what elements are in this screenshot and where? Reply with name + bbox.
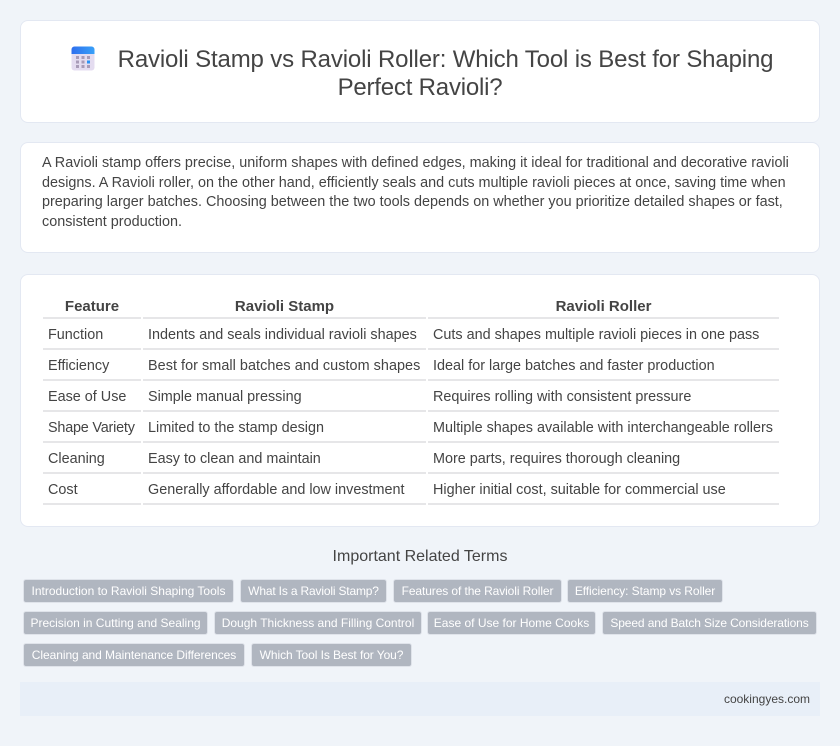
- comparison table: Generally affordable and low investment: [148, 482, 405, 498]
- table panel: [20, 274, 820, 527]
- comparison table: Easy to clean and maintain: [148, 451, 321, 467]
- related terms tags: Speed and Batch Size Considerations: [610, 616, 809, 630]
- row: shape variety: Shape Variety: [48, 420, 135, 436]
- comparison table: Multiple shapes available with interchangeable rollers: [433, 420, 773, 436]
- related terms tags: Ease of Use for Home Cooks: [434, 616, 589, 630]
- row: function: Function: [48, 327, 103, 343]
- related terms tags: Which Tool Is Best for You?: [260, 648, 403, 662]
- comparison table: [43, 298, 779, 505]
- description text: designs. A Ravioli roller, on the other hand, efficiently seals and cuts multiple ravioli pieces at once, saving time when: [42, 175, 786, 191]
- related terms tags: Introduction to Ravioli Shaping Tools: [32, 584, 225, 598]
- footer bar: [20, 682, 820, 716]
- comparison table: More parts, requires thorough cleaning: [433, 451, 680, 467]
- description text: preparing larger batches. Choosing between the two tools depends on whether you prioritize detailed shapes or fast,: [42, 194, 783, 210]
- footer source: cookingyes.com: [724, 692, 810, 706]
- comparison table: Requires rolling with consistent pressure: [433, 389, 691, 405]
- icon: calendar: [72, 46, 94, 70]
- related terms tags: Dough Thickness and Filling Control: [222, 616, 414, 630]
- row: ease of use: Ease of Use: [48, 389, 126, 405]
- header: stamp: Ravioli Stamp: [235, 298, 334, 315]
- comparison table: Indents and seals individual ravioli shapes: [148, 327, 417, 343]
- comparison table: Ideal for large batches and faster production: [433, 358, 715, 374]
- row: cost: Cost: [48, 482, 78, 498]
- heading: Ravioli Stamp vs Ravioli Roller: Which Tool is Best for Shaping: [118, 46, 773, 72]
- related terms tags: Features of the Ravioli Roller: [402, 584, 553, 598]
- related terms tags: What Is a Ravioli Stamp?: [248, 584, 379, 598]
- heading: [118, 46, 773, 101]
- description panel: [20, 142, 820, 253]
- comparison table: Best for small batches and custom shapes: [148, 358, 420, 374]
- description text: [42, 155, 789, 230]
- comparison table: Higher initial cost, suitable for commercial use: [433, 482, 726, 498]
- related terms tags: Efficiency: Stamp vs Roller: [575, 584, 715, 598]
- related terms tags: Cleaning and Maintenance Differences: [32, 648, 236, 662]
- description text: consistent production.: [42, 214, 182, 230]
- comparison table: Limited to the stamp design: [148, 420, 324, 436]
- row: cleaning: Cleaning: [48, 451, 105, 467]
- related terms heading: Important Related Terms: [333, 548, 507, 565]
- header: feature: Feature: [65, 298, 119, 315]
- related terms tags: Precision in Cutting and Sealing: [30, 616, 201, 630]
- title card: [20, 20, 820, 123]
- comparison table: Cuts and shapes multiple ravioli pieces in one pass: [433, 327, 759, 343]
- comparison table: Simple manual pressing: [148, 389, 302, 405]
- header: roller: Ravioli Roller: [556, 298, 651, 315]
- description text: A Ravioli stamp offers precise, uniform shapes with defined edges, making it ideal for traditional and decorative ravioli: [42, 155, 789, 171]
- row: efficiency: Efficiency: [48, 358, 109, 374]
- heading: Perfect Ravioli?: [338, 74, 502, 101]
- related terms tags: [23, 579, 817, 667]
